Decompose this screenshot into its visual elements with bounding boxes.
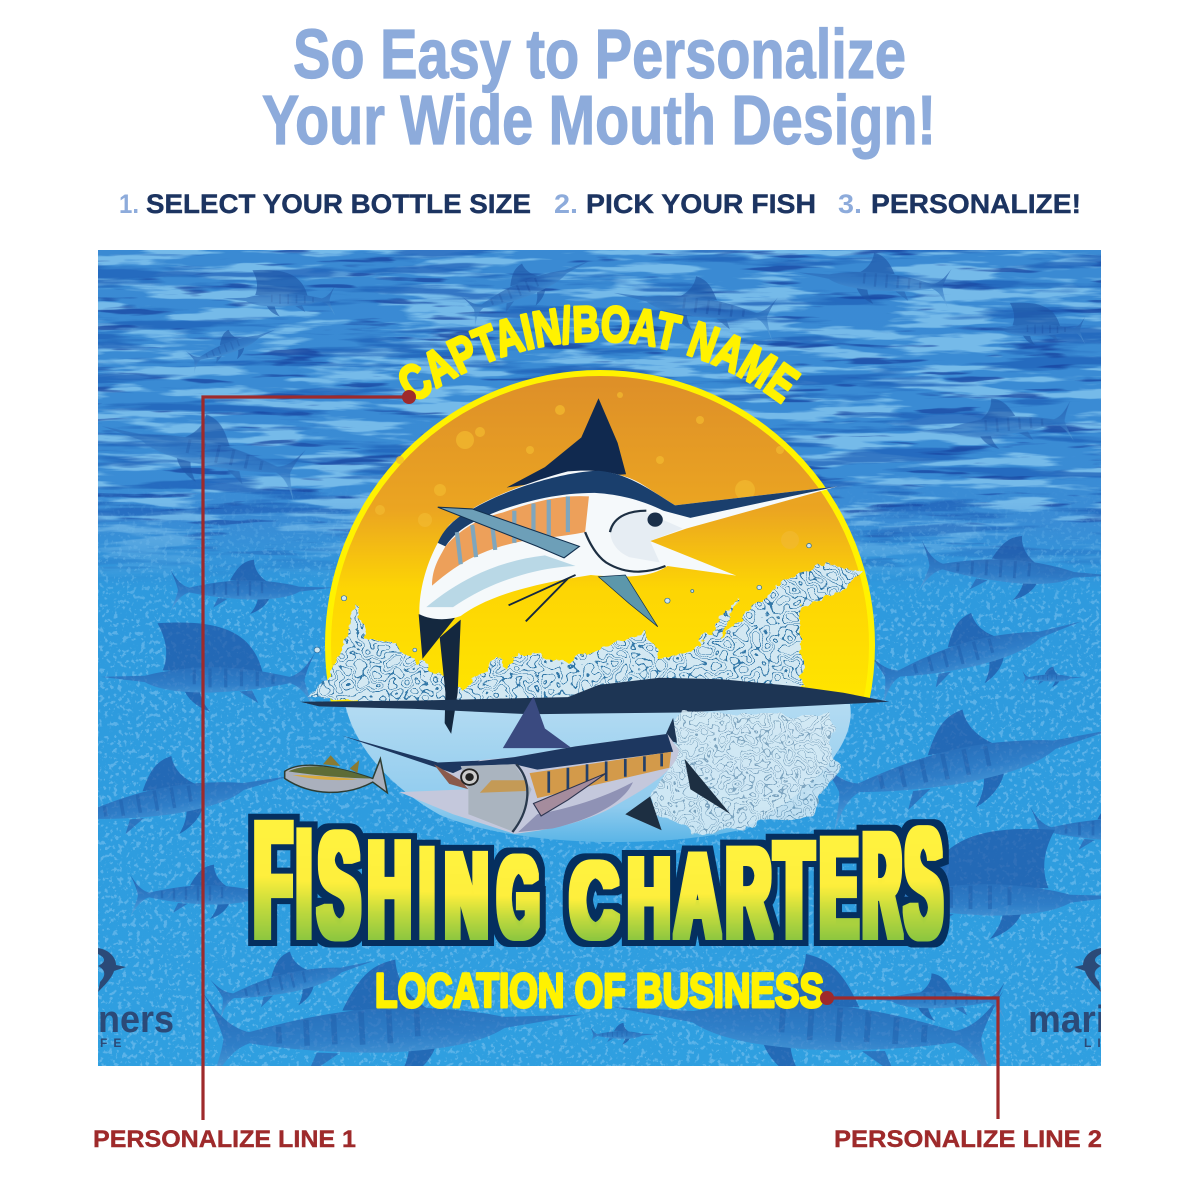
headline: fishing charters: N: [445, 828, 488, 963]
marlin body: [419, 471, 838, 619]
background fish, lower zone: [98, 536, 1101, 1066]
title line 2: Your Wide Mouth Design!: [262, 81, 936, 159]
step 1 number: 1.: [119, 189, 139, 219]
thin fins: [509, 575, 576, 621]
panel: bottle wrap design: [98, 250, 1101, 1066]
underwater marlin: [342, 696, 731, 834]
callout leader line 2: [820, 991, 998, 1119]
label: personalize line 2: PERSONALIZE LINE 2: [834, 1126, 1102, 1153]
underwater marlin bill: [342, 736, 480, 773]
step 2 number: 2.: [554, 189, 578, 219]
sun circle: [325, 370, 875, 702]
headline: fishing charters: S: [318, 803, 360, 970]
label: personalize line 1: PERSONALIZE LINE 1: [93, 1126, 356, 1153]
location text: LOCATION OF BUSINESS: [375, 965, 824, 1018]
underwater marlin belly: [518, 782, 633, 832]
dark water line: [300, 678, 889, 714]
right logo wordmark: mari: [1028, 999, 1106, 1041]
left logo icon: [98, 948, 126, 992]
left logo tagline: FE: [100, 1036, 127, 1050]
underwater marlin orange band: [530, 752, 671, 798]
left logo fragment: [98, 948, 174, 1050]
callout leader line 1: [203, 390, 416, 1120]
ocean background: [98, 250, 1101, 1066]
step 3 label: PERSONALIZE!: [871, 189, 1081, 219]
right logo tagline: LI: [1084, 1036, 1107, 1050]
underwater marlin back: [453, 734, 673, 770]
headline: fishing charters: S: [905, 795, 942, 970]
underwater splash: [650, 714, 838, 835]
right logo icon: [1074, 948, 1101, 992]
jumping marlin: [419, 398, 838, 734]
light underwater area: [345, 704, 851, 842]
underwater marlin head: [461, 764, 532, 832]
pectoral fin: [438, 507, 579, 558]
gill: [585, 511, 665, 572]
belly fin: [599, 575, 658, 627]
headline: fishing charters: T: [775, 814, 813, 967]
tuna: [285, 755, 387, 793]
underwater marlin fins: [625, 759, 731, 830]
speckle texture: [98, 470, 1101, 1066]
headline: fishing charters: I: [297, 797, 311, 970]
belly shading: [426, 555, 576, 607]
underwater marlin mouth: [434, 764, 468, 789]
headline: fishing charters: E: [820, 808, 858, 968]
dorsal fin: [507, 398, 626, 487]
steps row: [119, 189, 1081, 219]
head shading: [610, 512, 683, 562]
title: [262, 15, 936, 159]
underwater marlin eye: [461, 769, 478, 785]
orange stripes: [432, 496, 589, 586]
headline: fishing charters: H: [628, 834, 670, 961]
headline: fishing charters: I: [420, 822, 434, 965]
headline: fishing charters: C: [570, 840, 618, 960]
tail: [419, 614, 461, 734]
headline: fishing charters: R: [726, 822, 771, 965]
headline: fishing charters: A: [675, 829, 720, 963]
right logo fragment: [1030, 948, 1101, 1047]
underwater marlin pectoral fin: [533, 773, 606, 816]
underwater marlin tail stub: [666, 718, 677, 743]
headline: fishing charters: F: [254, 788, 292, 973]
headline: fishing charters: H: [368, 812, 411, 967]
arched text: captain/boat name: CAPTAIN/BOAT NAME: [398, 304, 802, 404]
underwater marlin body: [400, 734, 679, 834]
marlin back: [438, 471, 838, 546]
wave texture: [98, 250, 1101, 590]
wave splash above water: [308, 544, 863, 705]
headline: fishing charters: [254, 788, 942, 973]
step 1 label: SELECT YOUR BOTTLE SIZE: [146, 189, 531, 219]
step 2 label: PICK YOUR FISH: [586, 189, 816, 219]
step 3 number: 3.: [838, 189, 862, 219]
eye: [647, 512, 663, 527]
title line 1: So Easy to Personalize: [293, 15, 906, 93]
underwater marlin dorsal fin: [503, 696, 572, 748]
left logo wordmark: ners: [98, 999, 174, 1041]
background fish, upper zone: [94, 239, 1085, 504]
droplets: [314, 544, 811, 653]
headline: fishing charters: G: [498, 832, 539, 962]
headline: fishing charters: R: [863, 803, 901, 970]
